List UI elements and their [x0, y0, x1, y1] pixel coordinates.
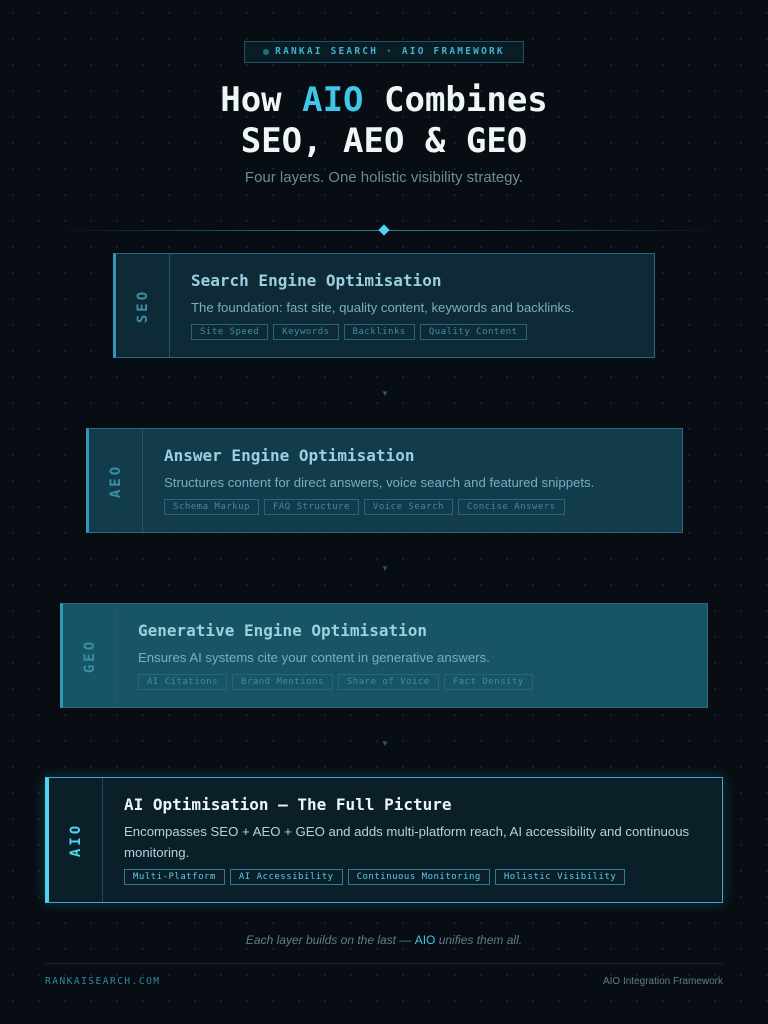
- footer note: Each layer builds on the last — AIO unifies them all.: [246, 933, 522, 947]
- content: AEO: Schema Markup: [173, 502, 250, 512]
- content: AIO: Continuous Monitoring: [357, 872, 481, 882]
- content: SEO: The foundation: fast site, quality content, keywords and backlinks.: [191, 300, 574, 315]
- content: SEO: Backlinks: [353, 327, 406, 337]
- content: AEO: Concise Answers: [467, 502, 556, 512]
- footer left: RANKAISEARCH.COM: [45, 976, 161, 987]
- content: SEO: Site Speed: [200, 327, 259, 337]
- content: AIO: Encompasses SEO + AEO + GEO and adds multi-platform reach, AI accessibility and continuous monitoring.: [124, 824, 689, 860]
- content: SEO: Search Engine Optimisation: [191, 271, 441, 290]
- title: How AIO Combines: [220, 80, 548, 120]
- content: GEO: Share of Voice: [347, 677, 430, 687]
- footer right: AIO Integration Framework: [603, 976, 723, 987]
- content: SEO: [191, 271, 574, 340]
- badge: RANKAI SEARCH · AIO FRAMEWORK: [275, 46, 505, 57]
- content: AIO: [124, 795, 689, 885]
- subtitle: Four layers. One holistic visibility strategy.: [245, 169, 523, 186]
- title: [220, 80, 548, 161]
- arrow: ▼: [381, 389, 389, 398]
- label: GEO: [63, 604, 117, 707]
- content: GEO: Brand Mentions: [241, 677, 324, 687]
- content: GEO: [138, 621, 533, 690]
- label: AEO: [89, 429, 143, 532]
- title: SEO, AEO & GEO: [241, 121, 527, 161]
- content: AIO: AI Accessibility: [239, 872, 334, 882]
- content: GEO: Ensures AI systems cite your content in generative answers.: [138, 650, 490, 665]
- arrow: ▼: [381, 739, 389, 748]
- content: AIO: AI Optimisation — The Full Picture: [124, 795, 452, 814]
- label: AIO: [49, 778, 103, 902]
- content: AEO: Answer Engine Optimisation: [164, 446, 414, 465]
- icon: diamond: [378, 224, 390, 236]
- content: SEO: Keywords: [282, 327, 330, 337]
- label: SEO: SEO: [134, 288, 150, 323]
- panel: SEO: [113, 253, 655, 358]
- content: AEO: [164, 446, 594, 515]
- content: GEO: AI Citations: [147, 677, 218, 687]
- content: AEO: FAQ Structure: [273, 502, 350, 512]
- content: GEO: Fact Density: [453, 677, 524, 687]
- label: AEO: AEO: [108, 463, 124, 498]
- content: AEO: Structures content for direct answers, voice search and featured snippets.: [164, 475, 594, 490]
- arrow: ▼: [381, 564, 389, 573]
- content: AEO: Voice Search: [373, 502, 444, 512]
- content: SEO: Quality Content: [429, 327, 518, 337]
- badge: [244, 41, 524, 63]
- content: AIO: Multi-Platform: [133, 872, 216, 882]
- panel: GEO: [60, 603, 708, 708]
- content: GEO: Generative Engine Optimisation: [138, 621, 427, 640]
- label: GEO: GEO: [82, 638, 98, 673]
- content: AIO: Holistic Visibility: [504, 872, 616, 882]
- label: SEO: [116, 254, 170, 357]
- panel: AIO: [45, 777, 723, 903]
- label: AIO: AIO: [68, 823, 84, 857]
- panel: AEO: [86, 428, 683, 533]
